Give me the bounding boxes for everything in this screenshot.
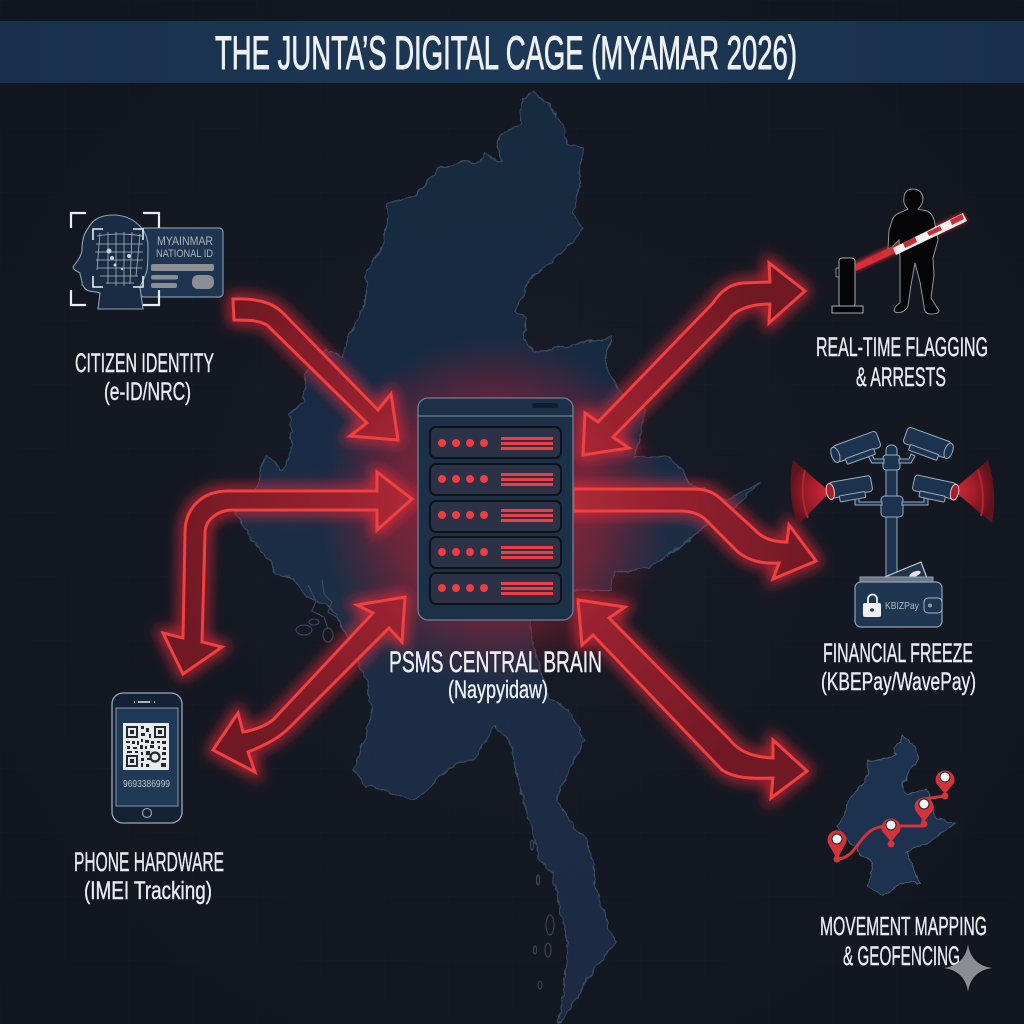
label: phone hardware: (IMEI Tracking) <box>84 877 212 905</box>
label: phone hardware: PHONE HARDWARE <box>74 847 224 877</box>
PSMS server icon <box>418 398 573 620</box>
label: PSMS central brain: (Naypyidaw) <box>448 676 548 704</box>
icon: locked KBZPay wallet <box>855 562 942 627</box>
icon: locked KBZPay wallet: KBIZPay <box>885 600 920 612</box>
label: financial freeze <box>821 638 976 696</box>
arrow: two-way diagonal to phone <box>213 597 405 772</box>
icon: face scan and national ID card: MYAINMAR <box>157 234 213 248</box>
arrow: two-way to real-time flagging <box>583 263 805 455</box>
icon: sparkle watermark <box>944 944 992 992</box>
icon: soldier and boom barrier <box>832 189 967 314</box>
label: citizen identity: (e-ID/NRC) <box>104 378 191 406</box>
label: real-time flagging and arrests <box>816 332 988 392</box>
title band <box>0 21 1024 83</box>
icon: movement map with pins <box>828 735 955 897</box>
islands near the coast <box>296 580 554 989</box>
label: real-time flagging and arrests: & ARRESTS <box>856 362 946 392</box>
arrow: citizen identity to server <box>233 299 398 440</box>
label: PSMS central brain: PSMS CENTRAL BRAIN <box>389 646 602 679</box>
icon: phone with QR code <box>112 693 182 823</box>
label: phone hardware <box>74 847 224 905</box>
icon: CCTV pole with red scan cones <box>790 427 994 580</box>
map of Myanmar <box>235 93 759 1023</box>
arrow: two-way to movement mapping <box>578 600 807 798</box>
arrow: two-way between server and phone hardware (curved) <box>163 472 412 674</box>
label: PSMS central brain <box>389 646 602 704</box>
arrow: server to financial freeze <box>573 489 816 579</box>
icon: face scan and national ID card: NATIONAL ID <box>156 248 213 260</box>
icon: phone with QR code: 9693386999 <box>123 779 170 790</box>
label: citizen identity: CITIZEN IDENTITY <box>75 348 214 378</box>
icon: face scan and national ID card <box>71 213 223 309</box>
label: movement mapping and geofencing <box>820 911 987 971</box>
label: citizen identity <box>75 348 214 406</box>
central red glow <box>300 320 700 700</box>
